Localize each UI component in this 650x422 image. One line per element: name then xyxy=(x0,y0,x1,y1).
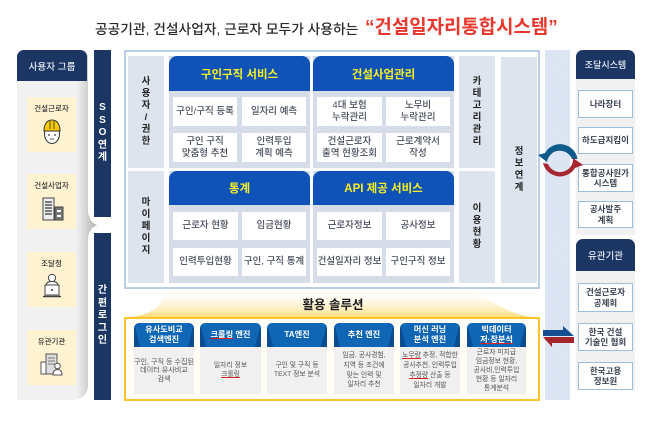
icon: buildings xyxy=(42,198,64,220)
header xyxy=(400,323,460,347)
item xyxy=(317,212,382,240)
header xyxy=(267,323,327,347)
card: related institution: 유관기관 xyxy=(38,337,65,346)
header xyxy=(467,323,526,347)
item: 누락관리 xyxy=(401,112,435,122)
icon: person at laptop xyxy=(43,274,61,298)
header xyxy=(200,323,261,347)
header: 빅데이터 xyxy=(481,324,512,334)
icon: two-way arrows xyxy=(543,326,574,347)
header: 추천 엔진 xyxy=(348,330,380,339)
panel background xyxy=(17,50,88,400)
heading: job service: 구인구직 서비스 xyxy=(201,68,278,80)
institution: 한국 건설 xyxy=(589,326,622,336)
heading xyxy=(576,50,635,79)
side label: info link: 연 xyxy=(515,170,523,181)
solution: machine learning xyxy=(400,323,460,394)
item xyxy=(173,97,237,126)
side label: my page: 페 xyxy=(142,221,150,232)
description: 일자리 정보 xyxy=(214,362,247,369)
description xyxy=(334,347,394,394)
side label: usage status: 황 xyxy=(473,239,481,250)
item: 계획 예측 xyxy=(255,148,293,158)
item: 구인구직 정보 xyxy=(390,256,446,267)
side label: usage status: 용 xyxy=(473,215,481,226)
item: 인력투입현황 xyxy=(179,256,232,267)
item: 인력투입 xyxy=(256,136,291,147)
item xyxy=(242,133,306,162)
item xyxy=(173,212,238,240)
panel: job service xyxy=(169,56,310,168)
description: 크롤링 xyxy=(221,370,240,378)
item: 근로자정보 xyxy=(328,220,371,231)
institution xyxy=(578,362,633,390)
panel: main services frame xyxy=(124,50,540,289)
bar: SSO link: 연 xyxy=(98,140,107,151)
panel: solutions xyxy=(124,317,540,401)
item xyxy=(386,97,450,126)
header: 크롤링 엔진 xyxy=(211,330,250,339)
bar: SSO link: 계 xyxy=(98,152,107,163)
hatched link band xyxy=(545,50,570,400)
description xyxy=(267,347,327,394)
side label: my page: 지 xyxy=(142,245,150,256)
side label: usage status xyxy=(459,171,495,283)
side label: usage status: 현 xyxy=(473,227,481,238)
description: 일자리 추천 xyxy=(347,381,381,388)
card: construction worker: 건설근로자 xyxy=(34,104,69,113)
header: 저·장분석 xyxy=(480,335,513,344)
bar: simple login: 그 xyxy=(98,323,107,334)
description xyxy=(134,347,194,394)
item: 구인 구직 xyxy=(186,136,224,147)
heading: user group xyxy=(17,50,87,81)
item: 노무비 xyxy=(405,100,431,111)
item xyxy=(242,97,306,126)
header: 분석 엔진 xyxy=(414,335,446,344)
side label: info link: 정 xyxy=(515,146,523,157)
heading: job service xyxy=(169,56,310,91)
item: 작성 xyxy=(409,148,427,158)
side label: my page xyxy=(128,171,164,283)
item: 맞춤형 추천 xyxy=(182,148,228,158)
heading xyxy=(576,239,635,271)
description: 지역 등 조건에 xyxy=(343,362,385,369)
item: 근로자 현황 xyxy=(182,220,229,231)
system xyxy=(578,201,633,228)
panel: API service xyxy=(313,171,454,283)
institution: 기술인 협회 xyxy=(585,337,626,347)
item: 임금현황 xyxy=(257,220,291,231)
item xyxy=(386,212,450,240)
system: 하도급지킴이 xyxy=(582,135,629,145)
solution: recommendation xyxy=(334,323,394,394)
solution: crawling xyxy=(200,323,261,394)
system: 나라장터 xyxy=(590,99,621,109)
side label: category management: 테 xyxy=(473,88,481,99)
header: 머신 러닝 xyxy=(414,324,446,334)
heading: 조달시스템 xyxy=(585,60,626,70)
side label: category management: 고 xyxy=(473,100,481,111)
description: 근로자 미지급 xyxy=(477,349,516,356)
side label: my page: 이 xyxy=(142,233,150,244)
title xyxy=(95,16,558,38)
description: 검색 xyxy=(157,375,171,383)
description: 구인 및 구직 등 xyxy=(275,362,319,369)
item xyxy=(386,248,450,276)
institution: 건설근로자 xyxy=(586,287,625,297)
description: 현황 등 일자리 xyxy=(476,376,517,383)
card: procurement agency: 조달청 xyxy=(41,259,62,268)
title: 공공기관, 건설사업자, 근로자 모두가 사용하는 xyxy=(95,22,358,37)
side label: category management xyxy=(459,56,495,168)
panel: procurement systems xyxy=(576,50,635,235)
item: 건설일자리 정보 xyxy=(318,256,381,267)
header: 유사도비교 xyxy=(145,324,183,334)
icon: building with person xyxy=(40,354,62,376)
side label: my page: 이 xyxy=(142,209,150,220)
description: 공사비,인력투입 xyxy=(474,367,519,374)
item xyxy=(242,248,306,276)
heading band: solutions xyxy=(132,295,532,317)
heading: construction management: 건설사업관리 xyxy=(352,68,415,80)
institution xyxy=(578,283,633,312)
bar: simple login: 인 xyxy=(98,335,107,346)
description xyxy=(400,347,460,394)
description: 추정량 산출 등 xyxy=(409,372,451,378)
item: 일자리 예측 xyxy=(251,106,297,117)
system xyxy=(578,90,633,118)
description: 통계분석 xyxy=(484,385,509,392)
pointer toward the login bars xyxy=(88,213,97,237)
system xyxy=(578,164,633,192)
institution xyxy=(578,323,633,351)
description: TEXT 정보 분석 xyxy=(274,370,320,378)
description: 공사추천, 인력투입 xyxy=(403,362,457,368)
icon: circular exchange arrows xyxy=(538,144,583,176)
system: 공사발주 xyxy=(590,204,621,214)
icon: worker with helmet xyxy=(44,120,60,144)
description: 임금, 공사경험, xyxy=(342,352,386,359)
system: 계획 xyxy=(598,214,613,224)
panel: construction management xyxy=(313,56,454,168)
card: contractor: 건설사업자 xyxy=(34,181,69,190)
item xyxy=(173,248,238,276)
panel: user group xyxy=(17,50,97,400)
header xyxy=(134,323,194,347)
description: 구인, 구직 등 수집된 xyxy=(134,358,194,366)
card: construction worker xyxy=(27,97,76,152)
bar: SSO link: S xyxy=(99,115,106,126)
system: 시스템 xyxy=(594,178,617,188)
heading: user group: 사용자 그룹 xyxy=(29,62,75,72)
description xyxy=(467,347,526,394)
description: 맞는 인력 및 xyxy=(346,372,382,378)
heading text: 활용 솔루션 xyxy=(302,298,363,312)
item: 구인, 구직 통계 xyxy=(244,256,304,267)
heading: API service xyxy=(313,171,454,205)
item: 건설근로자 xyxy=(328,136,371,147)
solution: TA xyxy=(267,323,327,394)
bar: SSO link xyxy=(94,50,111,217)
panel: statistics xyxy=(169,171,310,283)
item xyxy=(317,248,382,276)
header xyxy=(334,323,394,347)
description: 노무량 추정, 적합한 xyxy=(402,352,458,358)
system xyxy=(578,127,633,154)
side label: category management: 관 xyxy=(473,124,481,135)
heading: statistics xyxy=(169,171,310,205)
side label: info link: 계 xyxy=(515,182,523,193)
band gradient xyxy=(132,295,532,317)
card: contractor xyxy=(27,174,76,229)
card: related institution xyxy=(27,330,76,385)
side label: user permissions: 사 xyxy=(142,76,150,87)
item: 누락관리 xyxy=(332,112,367,122)
item: 4대 보험 xyxy=(332,100,367,111)
item xyxy=(317,133,382,162)
item xyxy=(317,97,382,126)
institution: 한국고용 xyxy=(590,366,621,376)
title: “건설일자리통합시스템” xyxy=(365,17,558,38)
side label: info link xyxy=(501,57,537,283)
description: 데이터 유사비교 xyxy=(140,366,188,374)
side label: user permissions xyxy=(128,56,164,168)
heading: 유관기관 xyxy=(588,251,623,262)
bar: simple login: 편 xyxy=(98,298,107,309)
side label: user permissions: / xyxy=(145,112,147,123)
system: 통합공사원가 xyxy=(582,168,629,178)
side label: category management: 리 xyxy=(473,136,481,147)
card: procurement agency xyxy=(27,252,76,307)
side label: usage status: 이 xyxy=(473,203,481,214)
side label: info link: 보 xyxy=(515,158,523,169)
side label: category management: 카 xyxy=(473,76,481,87)
heading: statistics: 통계 xyxy=(229,183,250,195)
item xyxy=(173,133,237,162)
panel: related institutions xyxy=(576,239,635,390)
side label: category management: 리 xyxy=(473,112,481,123)
side label: user permissions: 자 xyxy=(142,100,150,111)
side label: my page: 마 xyxy=(142,197,150,208)
side label: user permissions: 한 xyxy=(142,136,150,147)
header: TA엔진 xyxy=(284,330,310,339)
bar: SSO link: S xyxy=(99,102,106,113)
item xyxy=(242,212,306,240)
item: 출역 현황조회 xyxy=(322,148,377,158)
institution: 공제회 xyxy=(594,298,617,308)
item: 근로계약서 xyxy=(396,136,440,147)
header: 검색엔진 xyxy=(149,335,179,344)
item xyxy=(386,133,450,162)
description xyxy=(200,347,261,394)
description: 일자리 개발 xyxy=(413,382,447,388)
bar: simple login: 로 xyxy=(98,310,107,321)
bar: SSO link: O xyxy=(99,127,106,138)
heading: API service: API 제공 서비스 xyxy=(344,183,423,195)
description: 임금정보 현황, xyxy=(476,358,517,365)
side label: user permissions: 용 xyxy=(142,88,150,99)
item: 구인/구직 등록 xyxy=(176,106,234,117)
bar: simple login xyxy=(94,233,111,400)
side label: user permissions: 권 xyxy=(142,124,150,135)
item: 공사정보 xyxy=(401,220,435,231)
institution: 정보원 xyxy=(594,376,617,386)
bar: simple login: 간 xyxy=(98,285,107,296)
solution: similarity search xyxy=(134,323,194,394)
solution: big data xyxy=(467,323,526,394)
heading: construction management xyxy=(313,56,454,91)
